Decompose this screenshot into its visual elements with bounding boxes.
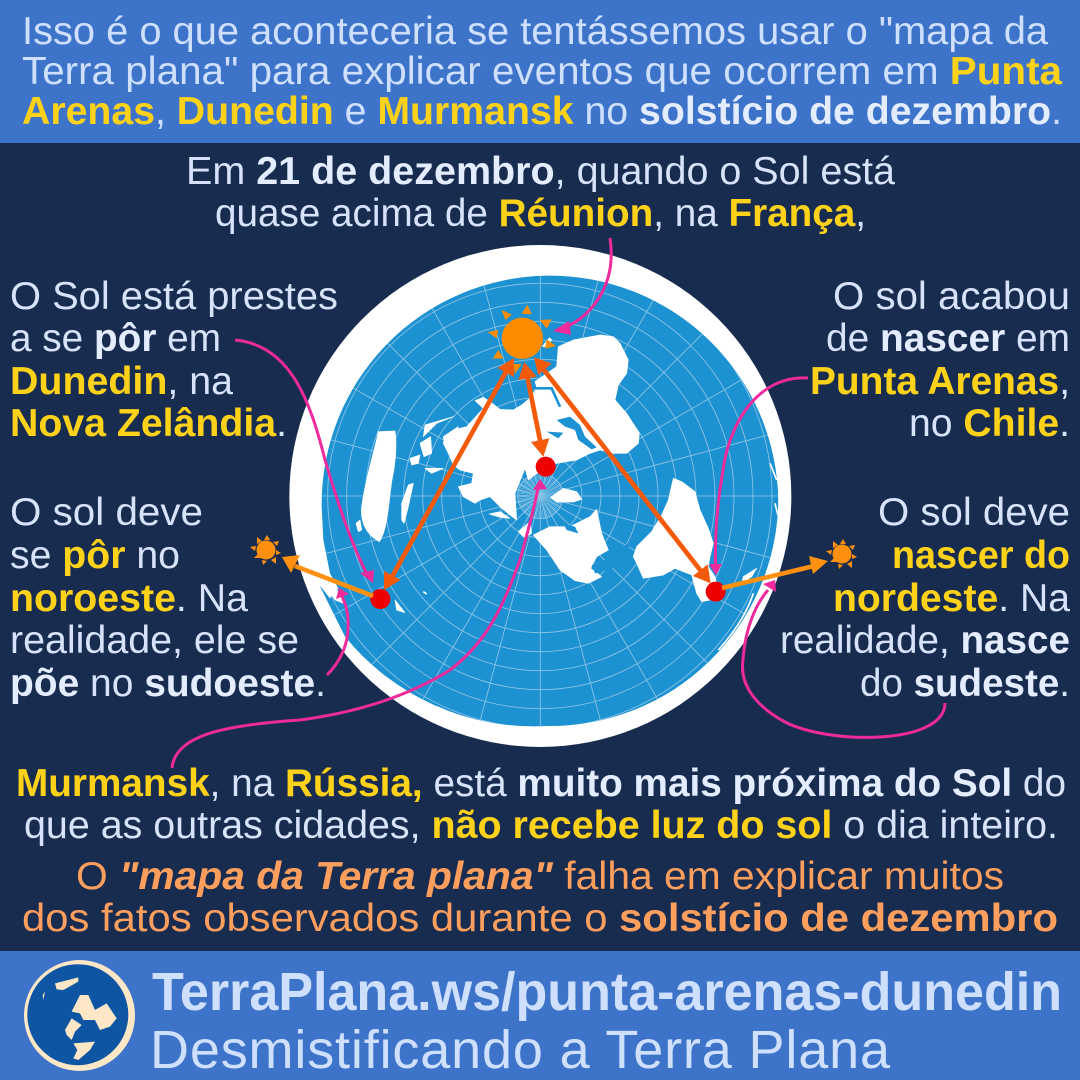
- right text: Punta Arenas: [810, 275, 1070, 445]
- orange direction arrow east: [722, 556, 828, 588]
- conclusion text: [22, 855, 1058, 940]
- arrow: Réunion to sun: [560, 238, 611, 329]
- left text: noroeste: realidade, ele se: [10, 619, 299, 662]
- conclusion text: dos fatos observados durante o solstício de dezembro: [22, 897, 1058, 940]
- right text: Punta Arenas: O sol acabou: [833, 275, 1070, 318]
- pink callout arrows: [172, 238, 945, 768]
- edge coasts: [395, 568, 757, 613]
- right text: nordeste: realidade, nasce: [780, 619, 1070, 662]
- conclusion text: O "mapa da Terra plana" falha em explicar muitos: [76, 855, 1004, 898]
- right text: nordeste: O sol deve: [878, 491, 1070, 534]
- Murmansk text: [16, 762, 1066, 847]
- left archipelago: [402, 427, 458, 523]
- left text: Dunedin: Nova Zelândia.: [10, 402, 287, 445]
- south landmass: [633, 478, 717, 602]
- right text: Punta Arenas: Punta Arenas,: [810, 360, 1070, 403]
- header text: [22, 10, 1062, 133]
- orange direction arrow west: [282, 555, 373, 596]
- arrow: sudoeste text: [327, 596, 348, 675]
- small sun west: [250, 535, 281, 565]
- arrow: Dunedin text to marker: [235, 340, 367, 574]
- footer tagline: Desmistificando a Terra Plana: [150, 1020, 891, 1080]
- right text: nordeste: nordeste. Na: [833, 577, 1070, 620]
- small sun east: [826, 539, 857, 569]
- intro text: quase acima de Réunion, na França,: [215, 192, 866, 235]
- header text: Terra plana" para explicar eventos que ocorrem em Punta: [22, 50, 1062, 93]
- land masses: [328, 335, 757, 613]
- right text: Punta Arenas: no Chile.: [909, 402, 1070, 445]
- header text: Isso é o que aconteceria se tentássemos usar o "mapa da: [22, 10, 1048, 53]
- small land pieces: [489, 488, 582, 537]
- white map ring: [289, 245, 791, 747]
- footer url: TerraPlana.ws/punta-arenas-dunedin: [152, 962, 1062, 1022]
- right text: nordeste: do sudeste.: [860, 662, 1070, 705]
- left text: Dunedin: [10, 275, 338, 445]
- double arrow: sun to Punta Arenas: [534, 357, 711, 583]
- inland seas: [535, 388, 630, 573]
- arrow: sudeste text: [742, 590, 945, 737]
- right text: Punta Arenas: de nascer em: [826, 317, 1070, 360]
- left text: noroeste: se pôr no: [10, 534, 180, 577]
- footer logo globe: [24, 960, 135, 1071]
- Murmansk text: Murmansk, na Rússia, está muito mais próxima do Sol do: [16, 762, 1066, 805]
- arrow: Punta Arenas text to marker: [715, 378, 808, 564]
- Eurasia and Africa: [443, 335, 639, 520]
- intro text: [186, 150, 895, 235]
- left text: noroeste: O sol deve: [10, 491, 203, 534]
- left text: Dunedin: a se pôr em: [10, 317, 221, 360]
- red city markers: [370, 457, 726, 609]
- double arrow: sun to Murmansk: [518, 362, 549, 457]
- arrow: Murmansk text to marker: [172, 488, 538, 768]
- double arrow: sun to Dunedin: [384, 358, 514, 590]
- pink arrow heads: [336, 321, 776, 599]
- right text: nordeste: [780, 491, 1070, 705]
- Americas north: [533, 509, 608, 583]
- left long island: [361, 431, 396, 542]
- ocean disc: [320, 276, 778, 726]
- left text: noroeste: [10, 491, 326, 705]
- header text: Arenas, Dunedin e Murmansk no solstício de dezembro.: [22, 90, 1062, 133]
- flat earth map: [280, 236, 800, 760]
- small island beside the sun: [542, 337, 552, 347]
- coastal streaks: [422, 463, 778, 710]
- left text: noroeste: noroeste. Na: [10, 577, 248, 620]
- header band: [0, 0, 1080, 143]
- intro text: Em 21 de dezembro, quando o Sol está: [186, 150, 895, 193]
- left text: noroeste: põe no sudoeste.: [10, 662, 326, 705]
- right text: nordeste: nascer do: [892, 534, 1070, 577]
- left text: Dunedin: Dunedin, na: [10, 360, 233, 403]
- left text: Dunedin: O Sol está prestes: [10, 275, 338, 318]
- footer band: [0, 951, 1080, 1080]
- main sun: [488, 305, 556, 374]
- Murmansk text: que as outras cidades, não recebe luz do sol o dia inteiro.: [24, 804, 1058, 847]
- graticule: [322, 276, 778, 726]
